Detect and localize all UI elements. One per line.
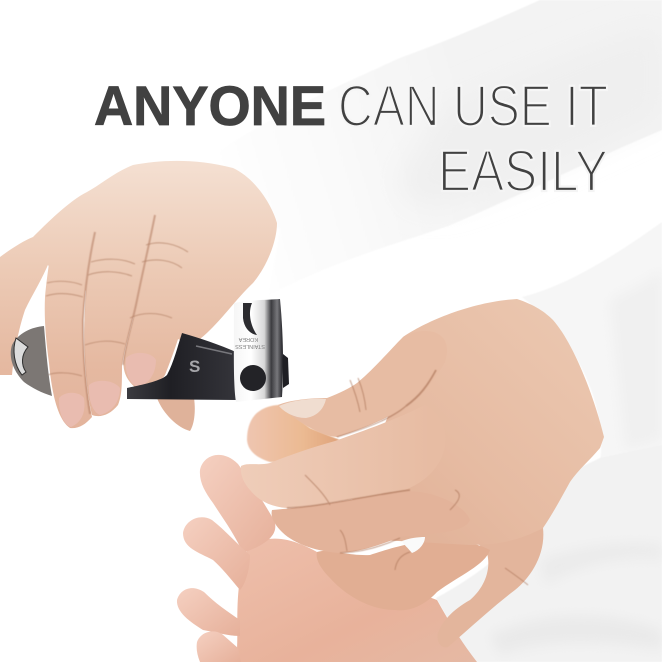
toe 2 xyxy=(200,455,275,553)
stamped text: KOREA xyxy=(238,336,258,342)
body highlight xyxy=(196,346,232,354)
title xyxy=(94,74,608,204)
back of hand xyxy=(350,299,604,545)
shadows between fingers xyxy=(83,215,155,414)
ANYONE: ANYONE xyxy=(94,74,326,137)
middle finger xyxy=(272,491,470,553)
tail button xyxy=(14,338,28,375)
thumb behind tool xyxy=(157,398,195,431)
thumbnail xyxy=(279,399,326,418)
ring finger xyxy=(45,223,97,428)
steel head xyxy=(234,299,283,402)
index finger xyxy=(241,405,445,508)
sole of foot xyxy=(236,539,477,662)
toe 5 xyxy=(197,631,241,662)
trousers xyxy=(436,445,662,662)
gap between fingers xyxy=(402,537,425,553)
clipper tail xyxy=(11,326,52,396)
index finger xyxy=(124,204,222,388)
finger creases xyxy=(46,243,188,376)
right forearm sleeve xyxy=(522,222,662,462)
big toe xyxy=(247,405,340,462)
clipper body xyxy=(127,333,236,400)
middle finger xyxy=(84,204,155,416)
nail clipper xyxy=(11,299,289,402)
right hand xyxy=(241,299,604,647)
foot with toes xyxy=(177,455,477,662)
back of hand xyxy=(33,161,277,345)
rivet xyxy=(240,365,266,391)
CAN USE IT: CAN USE IT xyxy=(338,74,608,139)
toe 3 xyxy=(183,517,250,590)
finger shadows xyxy=(287,370,528,585)
thumb xyxy=(278,331,447,437)
left hand xyxy=(0,161,277,431)
EASILY: EASILY xyxy=(438,139,608,204)
toe 4 xyxy=(177,588,240,636)
notch xyxy=(243,303,257,335)
side clip xyxy=(283,354,289,388)
fingernails xyxy=(59,353,156,427)
stamped text: STAINLESS xyxy=(235,343,265,349)
upper sleeve xyxy=(190,0,662,296)
logo: S xyxy=(189,357,200,376)
ring finger xyxy=(317,540,490,610)
little finger xyxy=(0,237,50,375)
little finger xyxy=(438,522,543,647)
